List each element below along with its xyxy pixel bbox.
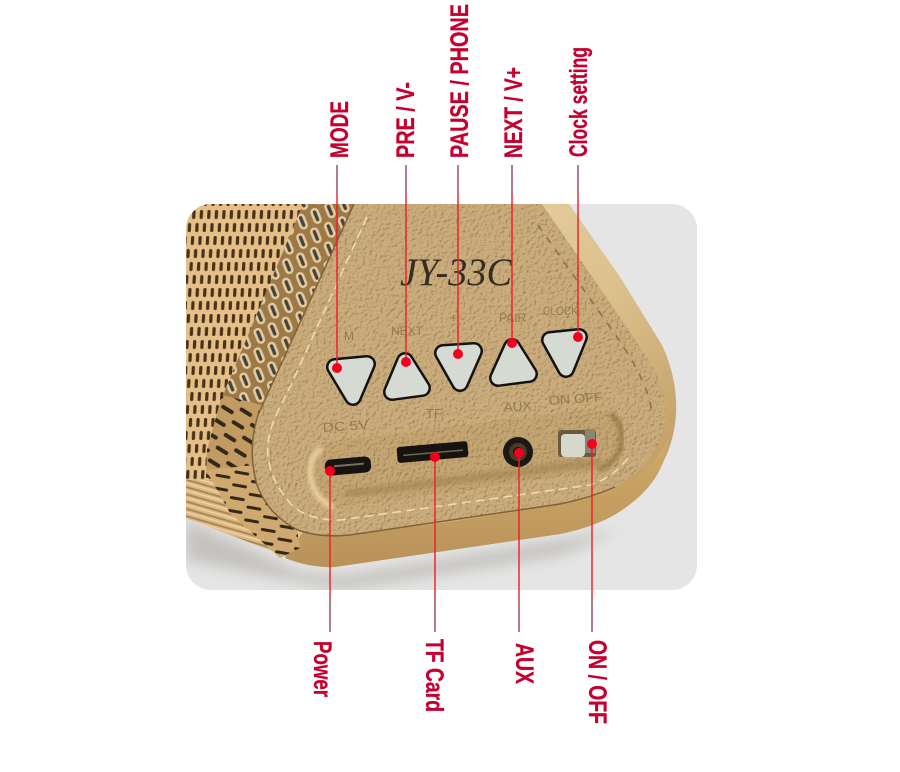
embossed markings: NEXT <box>391 324 424 338</box>
callout dots: top <box>332 332 583 373</box>
label: PRE / V-: PRE / V- <box>392 82 420 158</box>
speaker shadow <box>186 520 620 590</box>
recess ridges <box>345 462 600 494</box>
button: next <box>498 347 529 378</box>
speaker front face <box>252 204 665 536</box>
embossed markings <box>322 304 603 435</box>
embossed markings: TF <box>426 406 442 421</box>
speaker lower gold edge <box>285 440 668 567</box>
embossed markings: + - <box>450 311 464 325</box>
label: MODE: MODE <box>326 101 354 158</box>
mesh grille: angled band <box>222 204 356 415</box>
embossed markings: M <box>344 329 354 343</box>
label: Power: Power <box>308 641 336 697</box>
label: NEXT / V+: NEXT / V+ <box>500 67 528 158</box>
port: aux jack <box>503 437 533 467</box>
stitching: face seam <box>268 217 630 520</box>
face edge outline <box>252 204 615 536</box>
mesh grille: lower curved band <box>206 465 300 558</box>
label: AUX: AUX <box>510 643 538 684</box>
model name: JY-33C <box>400 251 513 294</box>
embossed markings: ON OFF <box>548 389 603 408</box>
label: ON / OFF: ON / OFF <box>583 640 611 724</box>
embossed markings: CLOCK <box>543 304 578 318</box>
mesh grille: curved band <box>206 395 262 478</box>
speaker photo <box>186 204 676 590</box>
button: clock <box>550 337 579 369</box>
panel: grey photo background <box>186 204 697 590</box>
port recess <box>309 410 625 507</box>
button: previous <box>392 361 422 392</box>
recess shadow <box>598 413 621 470</box>
recess highlight <box>310 448 334 508</box>
embossed markings: DC 5V <box>322 417 369 435</box>
mesh grille: lower ridged corner <box>186 480 277 553</box>
stitching: right seam <box>538 225 652 415</box>
infographic: speaker control diagram <box>186 4 697 724</box>
callout lines: bottom <box>330 444 592 632</box>
callout lines: top <box>337 165 578 368</box>
mesh grille: flat left side <box>186 204 304 490</box>
port: power usb <box>324 456 372 476</box>
speaker gold body rim <box>284 204 676 568</box>
embossed markings: AUX <box>503 398 532 415</box>
button: mode <box>335 364 367 397</box>
switch: on off <box>558 429 596 457</box>
label: Clock setting: Clock setting <box>565 47 593 157</box>
button: pause <box>443 351 474 383</box>
label: TF Card: TF Card <box>420 639 448 712</box>
embossed markings: PAIR <box>499 311 526 325</box>
callout dots: bottom <box>325 439 597 476</box>
port: tf card slot <box>396 441 469 463</box>
